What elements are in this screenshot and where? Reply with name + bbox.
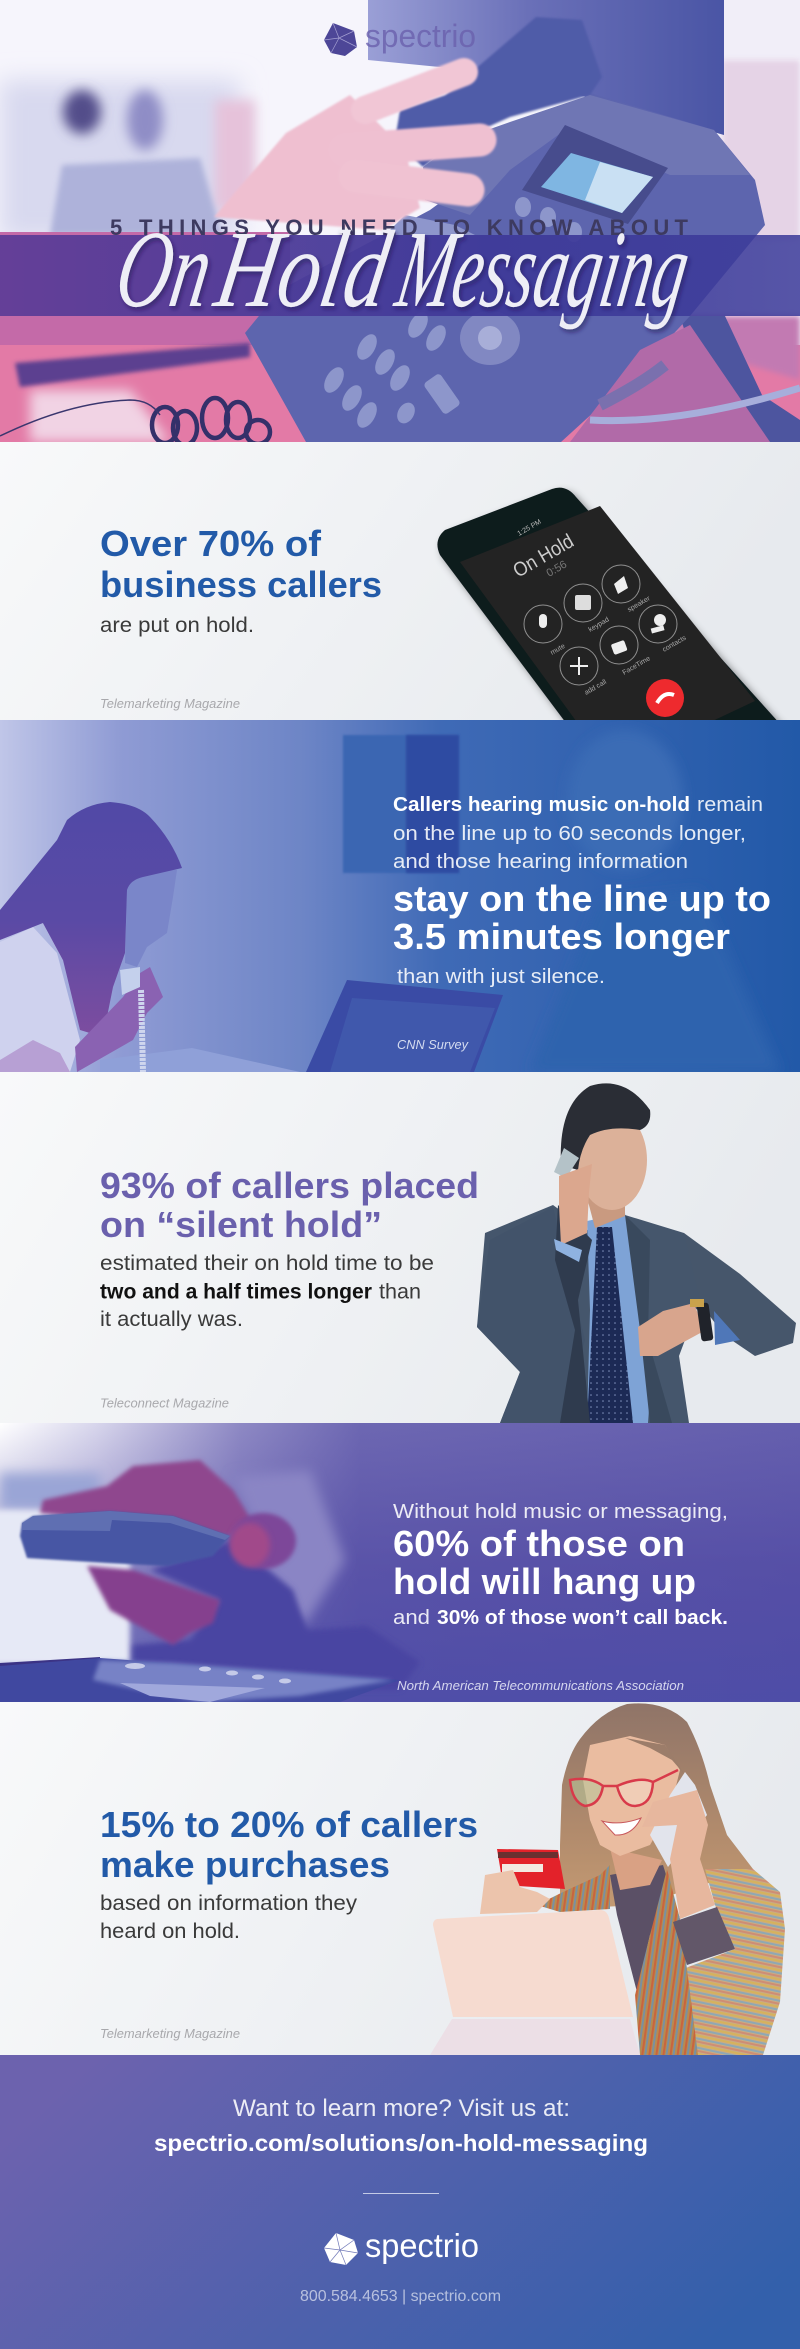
header photo: hand on desk phone xyxy=(0,0,800,445)
text block xyxy=(101,1894,357,1938)
url: spectrio.com/solutions/on-hold-messaging xyxy=(154,2130,648,2156)
icon: smartphone on hold screen: FaceTime xyxy=(622,655,652,677)
background photo: hand holding handset xyxy=(0,1460,420,1702)
title: on-hold messaging: Hold xyxy=(206,208,400,330)
source: North American Telecommunications Association xyxy=(397,1678,684,1693)
title: on-hold messaging xyxy=(120,230,690,334)
text block: hold will hang up xyxy=(393,1561,696,1602)
photo: woman with credit card and tablet xyxy=(430,1703,785,2055)
text block: stay on the line up to xyxy=(393,878,771,919)
text block: based on information they xyxy=(100,1892,358,1915)
title: 5 things: 5 THINGS YOU NEED TO KNOW ABOUT xyxy=(110,215,689,240)
text block: Without hold music or messaging, xyxy=(393,1501,728,1523)
icon: smartphone on hold screen: speaker xyxy=(626,595,652,614)
text block: 3.5 minutes longer xyxy=(393,916,730,957)
panel: music on hold xyxy=(0,720,800,1072)
heading xyxy=(101,1172,476,1238)
heading: business callers xyxy=(100,564,382,605)
panel: footer xyxy=(0,2055,800,2349)
icon: smartphone on hold screen: contacts xyxy=(662,634,688,654)
icon: smartphone on hold screen: 0:56 xyxy=(544,558,569,580)
icon: smartphone on hold screen: On Hold xyxy=(510,530,578,582)
text block: heard on hold. xyxy=(100,1920,240,1943)
call to action: Want to learn more? Visit us at: xyxy=(233,2095,570,2122)
heading: make purchases xyxy=(100,1844,390,1885)
panel: 70 percent on hold xyxy=(0,442,800,735)
photo: businessman checking watch xyxy=(477,1083,796,1423)
text block: remain xyxy=(697,794,763,816)
text block: on the line up to 60 seconds longer, xyxy=(393,823,746,845)
icon: smartphone on hold screen xyxy=(437,488,790,735)
heading: on “silent hold” xyxy=(100,1204,382,1245)
text block: 60% of those on xyxy=(393,1523,685,1564)
heading: Over 70% of xyxy=(100,523,322,564)
text block: estimated their on hold time to be xyxy=(100,1252,434,1275)
heading: 15% to 20% of callers xyxy=(100,1804,478,1845)
background photo: woman on telephone xyxy=(0,730,780,1072)
text block: and those hearing information xyxy=(393,851,688,873)
text block: than xyxy=(379,1280,421,1304)
text block: two and a half times longer xyxy=(100,1280,372,1304)
panel: silent hold xyxy=(0,1072,800,1423)
heading: 93% of callers placed xyxy=(100,1165,479,1206)
title: on-hold messaging: On xyxy=(108,208,221,330)
logo: spectrio xyxy=(324,22,475,56)
hand xyxy=(214,72,480,230)
icon: smartphone on hold screen: add call xyxy=(584,678,608,697)
source: Telemarketing Magazine xyxy=(100,2026,240,2041)
text block xyxy=(393,1501,728,1629)
title band xyxy=(0,235,800,316)
icon: smartphone on hold screen: keypad xyxy=(588,616,611,634)
text block xyxy=(100,1252,434,1331)
source: Teleconnect Magazine xyxy=(100,1396,229,1410)
logo: spectrio white: spectrio xyxy=(365,2227,479,2264)
text block: it actually was. xyxy=(100,1308,243,1331)
panel: hang up xyxy=(0,1423,800,1702)
text block: 30% of those won’t call back. xyxy=(437,1607,728,1629)
logo: spectrio: spectrio xyxy=(365,18,476,54)
text block: and xyxy=(393,1607,430,1629)
panel: header xyxy=(0,0,800,445)
source: CNN Survey xyxy=(397,1037,469,1052)
heading xyxy=(102,530,380,598)
contact info: 800.584.4653 | spectrio.com xyxy=(300,2288,501,2305)
icon: smartphone on hold screen: mute xyxy=(550,643,567,657)
text block xyxy=(393,794,771,988)
stand and lower body xyxy=(680,316,800,442)
panel: purchases xyxy=(0,1702,800,2055)
text block: than with just silence. xyxy=(397,966,605,988)
text block: Callers hearing music on-hold xyxy=(393,794,690,816)
heading xyxy=(100,1804,478,1885)
icon: smartphone on hold screen: 1:25 PM xyxy=(516,519,543,538)
text: are put on hold: are put on hold. xyxy=(100,614,254,637)
source: Telemarketing Magazine xyxy=(100,696,240,711)
